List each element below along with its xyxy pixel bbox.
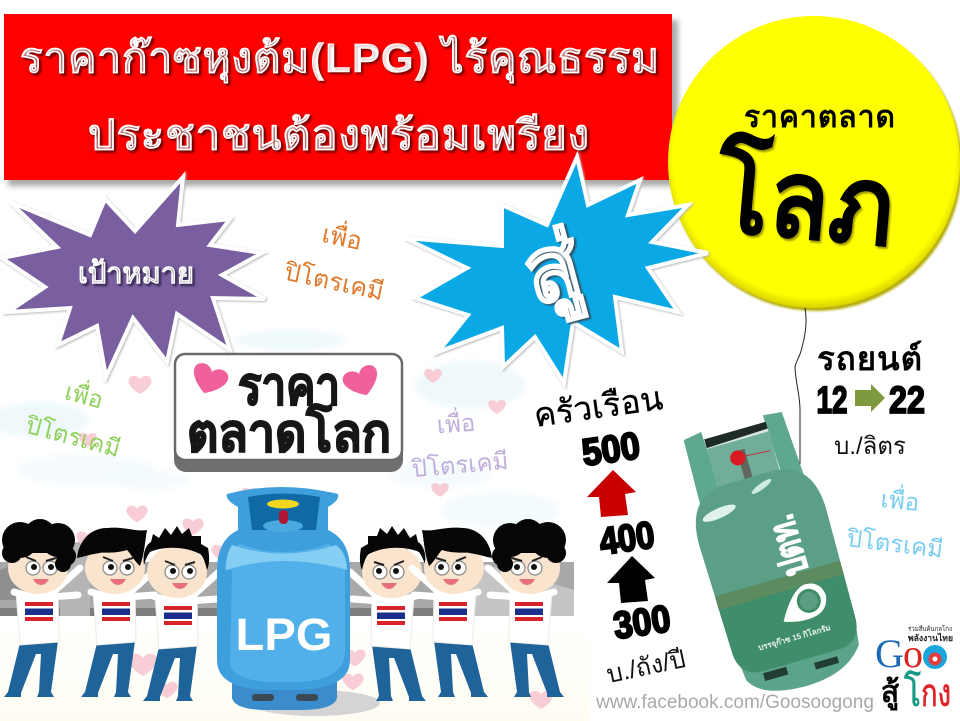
purple starburst [2, 177, 265, 377]
logo o: o [903, 631, 923, 676]
background buildings [0, 540, 574, 616]
orange note: เพื่อ [320, 216, 365, 256]
car price heading: รถยนต์ [817, 340, 923, 377]
price 400: 400 [597, 514, 657, 564]
logo: Goo anti-corruption: พลังงานไทย [908, 632, 953, 643]
tank collar [681, 408, 804, 506]
title line 1: ราคาก๊าซหุงต้ม(LPG) ไร้คุณธรรม [20, 34, 660, 84]
tank body [685, 460, 864, 679]
logo small text: ร่วมสืบค้นกลโกง [908, 625, 952, 633]
car prices [816, 380, 925, 422]
logo: Goo anti-corruption [875, 625, 953, 715]
balloon string [795, 308, 806, 473]
title banner [4, 14, 678, 186]
household unit: บ./ถัง/ปี [604, 645, 688, 689]
boy 2 [77, 528, 157, 697]
tank logo [775, 580, 831, 626]
light blue note [844, 482, 945, 564]
purple star label: เป้าหมาย [78, 258, 194, 290]
blue LPG tank [217, 487, 350, 710]
sign: world market price [174, 354, 403, 472]
household price heading: ครัวเรือน [531, 379, 665, 434]
boys right [350, 519, 566, 701]
green note: เพื่อ [62, 375, 107, 414]
lilac note: ปิโตรเคมี [410, 447, 509, 483]
circle caption: ราคาตลาด [744, 101, 896, 134]
light blue note: ปิโตรเคมี [844, 524, 945, 564]
price 500: 500 [579, 425, 643, 475]
sign text: ราคา [238, 358, 340, 416]
tank label: LPG [236, 609, 332, 660]
logo G: G [875, 631, 904, 676]
green note: ปิโตรเคมี [22, 411, 123, 463]
boy 3 [143, 526, 219, 701]
boy 6 [488, 519, 566, 697]
orange note: ปิโตรเคมี [281, 257, 386, 306]
circle big word: โลภ [711, 129, 900, 270]
orange note [281, 216, 386, 306]
sign: world market price: ตลาดโลก [187, 402, 391, 463]
title line 2: ประชาชนต้องพร้อมเพรียง [88, 112, 590, 158]
logo drop emblem [923, 645, 947, 669]
yellow circle: world market price [668, 16, 960, 311]
logo su: สู้ [881, 676, 900, 711]
logo kong [904, 671, 951, 715]
blue star label: สู่ [513, 214, 593, 329]
price 300: 300 [611, 598, 673, 648]
boy 1 [2, 519, 80, 697]
tank shadow [250, 690, 380, 716]
website url: www.facebook.com/Goosoogong [595, 692, 874, 713]
olive arrow [855, 384, 885, 412]
red arrow [587, 470, 636, 517]
light blue note: เพื่อ [879, 482, 921, 517]
green note [22, 375, 123, 463]
car unit: บ./ลิตร [834, 433, 906, 460]
boys left [2, 519, 219, 701]
green PTT tank [669, 405, 872, 704]
boy 4 [350, 526, 426, 701]
background clouds [0, 330, 560, 528]
car prices: 12 [816, 380, 848, 422]
lilac note [410, 406, 509, 483]
blue starburst [405, 157, 708, 383]
pink hearts [76, 369, 553, 709]
tank base [739, 630, 868, 702]
black arrow [607, 556, 655, 603]
car prices: 22 [889, 380, 925, 422]
tank small print: บรรจุก๊าซ 15 กิโลกรัม [757, 622, 832, 653]
boy 5 [412, 528, 492, 697]
tank brand: ปตท. [760, 510, 817, 581]
lilac note: เพื่อ [436, 406, 476, 439]
sign hearts [188, 361, 383, 401]
logo kong: โ [904, 671, 921, 715]
